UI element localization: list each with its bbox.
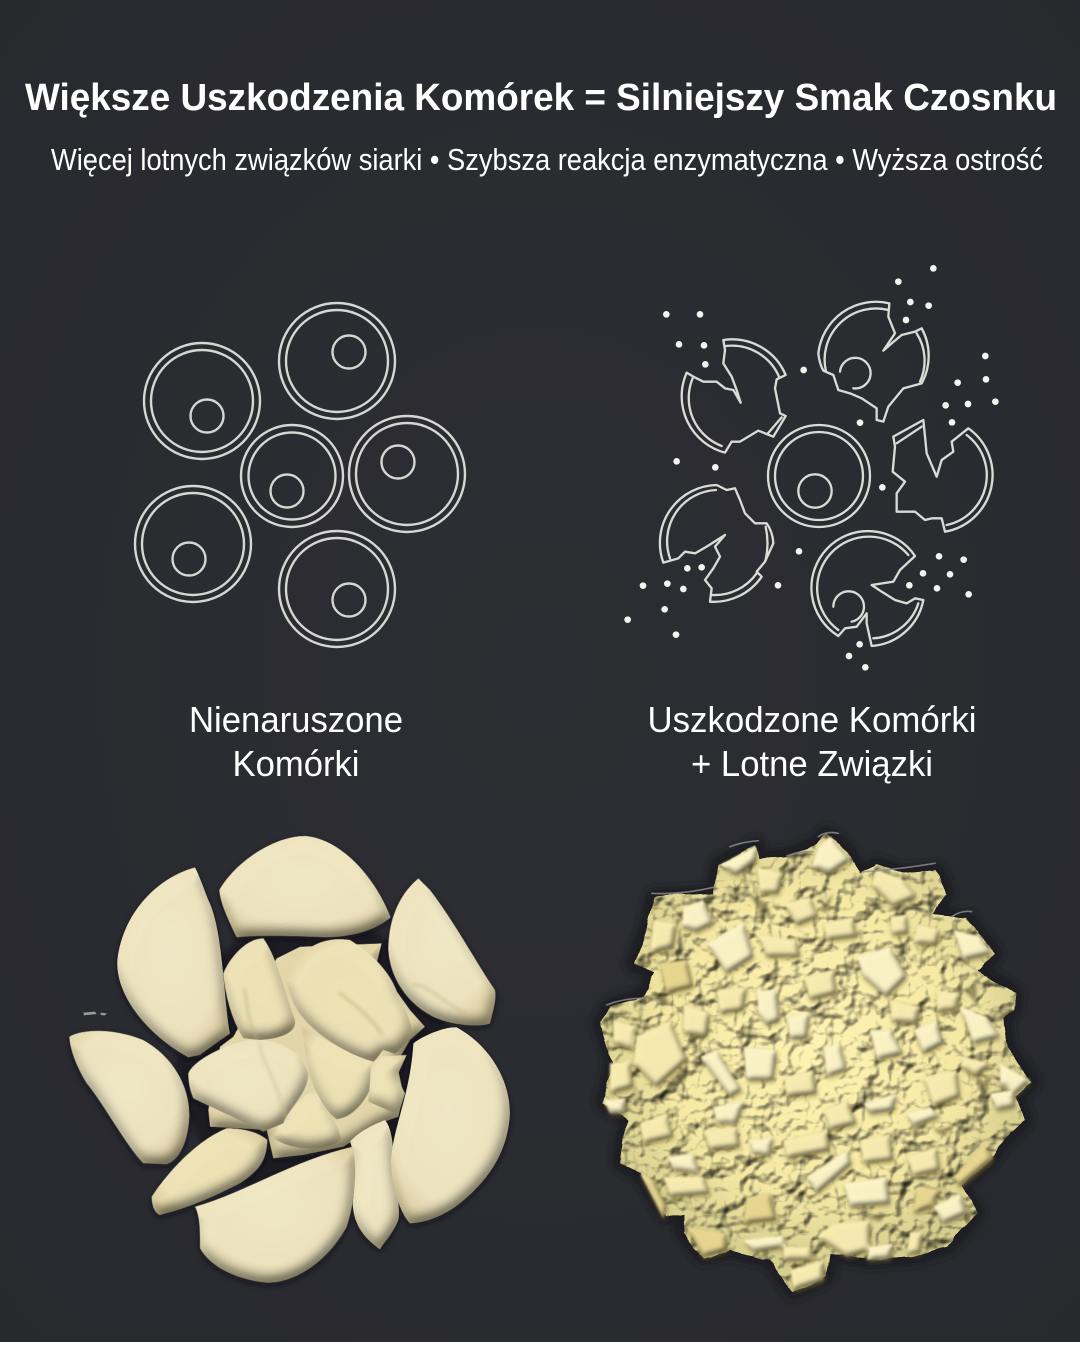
clove surface details xyxy=(245,985,470,1120)
label: intact cells: Nienaruszone xyxy=(189,699,403,740)
photo: whole garlic cloves xyxy=(69,836,510,1283)
damaged cell right xyxy=(893,420,993,532)
clove left large xyxy=(117,867,230,1057)
flattened slice xyxy=(287,939,412,1062)
dark gaps beneath cloves xyxy=(177,917,450,1203)
clove right large xyxy=(391,1027,510,1223)
photo: minced garlic xyxy=(600,833,1032,1292)
minced pile xyxy=(600,833,1032,1292)
torn fragment xyxy=(368,1055,407,1115)
dark crevices xyxy=(653,892,993,1222)
diagram: damaged cells and volatile compounds xyxy=(624,265,999,671)
label: intact cells: Komórki xyxy=(232,743,360,784)
crushed centre clove xyxy=(188,1040,308,1132)
intact cell 5 xyxy=(135,486,251,602)
small centre clove xyxy=(223,938,295,1040)
damaged cell lower left xyxy=(660,485,773,602)
clove bottom large xyxy=(195,1147,355,1283)
slice lower xyxy=(302,1027,375,1119)
clove lower thin xyxy=(350,1120,399,1249)
intact cell 6 xyxy=(279,531,395,647)
clove lower left wedge xyxy=(152,1128,267,1215)
diagram: intact cells xyxy=(135,303,465,647)
oil speck xyxy=(83,1012,107,1015)
centre filler flesh xyxy=(208,943,425,1158)
intact centre cell xyxy=(768,425,870,527)
clove top right xyxy=(388,878,495,1025)
title: Większe Uszkodzenia Komórek = Silniejszy Smak Czosnku xyxy=(25,77,1057,119)
minced chunks xyxy=(603,837,1030,1290)
garlic juice halo xyxy=(600,833,1032,1292)
damaged cell upper left xyxy=(682,339,786,453)
label: damaged cells: Uszkodzone Komórki xyxy=(648,699,976,740)
volatile compound dots xyxy=(624,265,999,671)
intact cell 1 xyxy=(144,343,260,459)
damaged cell upper right xyxy=(818,302,929,422)
intact cell 2 xyxy=(279,303,395,419)
label: damaged cells xyxy=(648,699,976,784)
label: damaged cells: + Lotne Związki xyxy=(691,743,933,784)
bottom white strip xyxy=(0,1342,1080,1350)
lower centre fragment xyxy=(273,1092,342,1149)
damaged cell lower xyxy=(811,531,923,646)
intact cell 3 xyxy=(241,425,343,527)
label: intact cells xyxy=(189,699,403,784)
clove top xyxy=(219,836,391,937)
juice glints xyxy=(607,833,972,1005)
clove far left xyxy=(69,1031,189,1164)
intact cell 4 xyxy=(349,416,465,532)
